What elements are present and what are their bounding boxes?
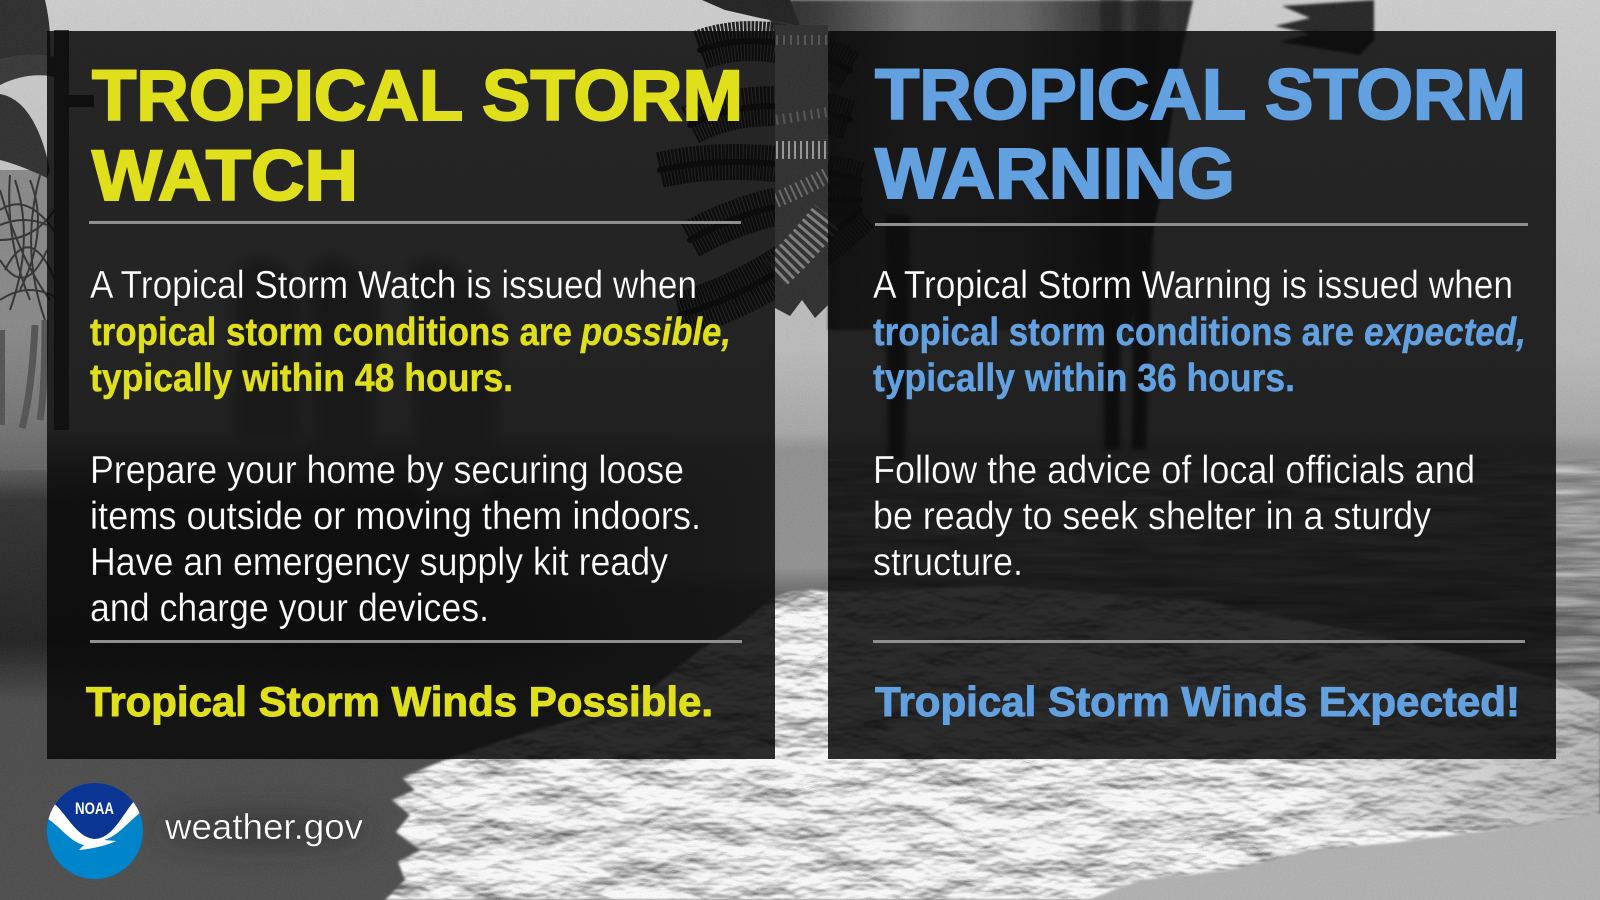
text block: watch advice: Prepare your home by securing loose xyxy=(90,449,684,492)
text block: watch definition: A Tropical Storm Watch is issued when xyxy=(90,264,697,307)
heading: tropical storm warning xyxy=(875,56,1526,214)
text block: watch definition: possible, xyxy=(580,311,731,354)
heading: tropical storm watch xyxy=(92,57,743,216)
text block: warning advice: Follow the advice of local officials and xyxy=(873,449,1475,492)
text block: watch advice xyxy=(90,449,701,630)
text block: watch definition: typically within 48 hours. xyxy=(90,357,513,400)
palm trunks xyxy=(885,0,1160,460)
panel background xyxy=(47,31,775,759)
callout: winds possible: Tropical Storm Winds Possible. xyxy=(86,678,713,725)
text block: warning definition: A Tropical Storm Warning is issued when xyxy=(873,264,1513,307)
text block: watch definition: tropical storm conditions are xyxy=(90,311,572,354)
trees on the left edge xyxy=(0,0,94,470)
website label: weather.gov xyxy=(164,806,363,847)
dark shore on the left xyxy=(0,470,603,886)
text block: warning advice xyxy=(873,449,1475,584)
panel: tropical storm warning xyxy=(828,31,1556,759)
panel: tropical storm watch xyxy=(47,31,775,759)
text block: warning advice: be ready to seek shelter in a sturdy xyxy=(873,495,1431,538)
panel background xyxy=(828,31,1556,759)
text block: watch advice: items outside or moving them indoors. xyxy=(90,495,701,538)
text block: warning definition: typically within 36 hours. xyxy=(873,357,1295,400)
wet sand bottom right xyxy=(1075,813,1600,900)
rough water streaks on the right xyxy=(828,459,1600,759)
text block: watch advice: and charge your devices. xyxy=(90,587,489,630)
palm in centre xyxy=(660,0,860,318)
heading: tropical storm warning: TROPICAL STORM xyxy=(875,56,1526,135)
faint palms behind left panel xyxy=(235,258,500,500)
text block: watch definition xyxy=(90,264,731,400)
dark tree mass top centre xyxy=(770,0,1193,330)
icon: NOAA logo: NOAA xyxy=(75,799,114,818)
text block: warning advice: structure. xyxy=(873,541,1023,584)
heading: tropical storm watch: TROPICAL STORM xyxy=(92,57,743,136)
callout: winds expected: Tropical Storm Winds Expected! xyxy=(875,678,1520,725)
far right tree fronds xyxy=(1275,0,1374,55)
text block: watch advice: Have an emergency supply kit ready xyxy=(90,541,668,584)
text block: warning definition: expected, xyxy=(1364,311,1526,354)
text block: warning definition xyxy=(873,264,1526,400)
heading: tropical storm warning: WARNING xyxy=(875,135,1235,214)
icon: NOAA logo xyxy=(45,775,143,879)
text block: warning definition: tropical storm conditions are xyxy=(873,311,1354,354)
white sea foam xyxy=(380,580,1600,900)
heading: tropical storm watch: WATCH xyxy=(92,137,358,216)
